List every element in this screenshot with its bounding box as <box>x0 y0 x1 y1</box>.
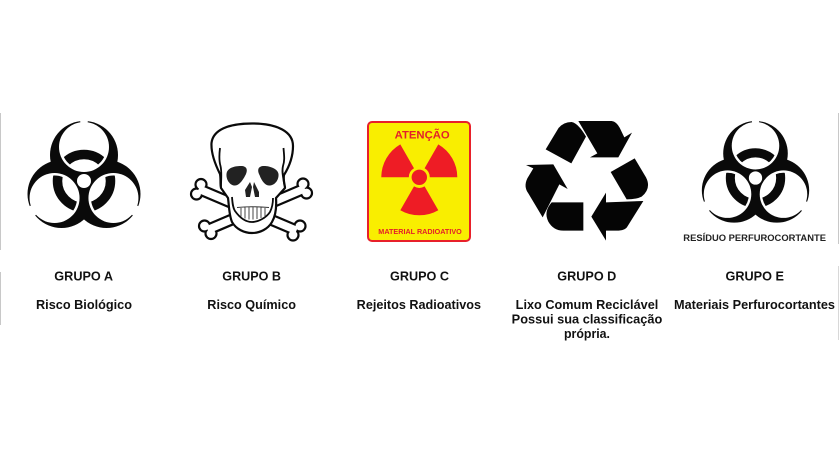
label: group D: Lixo Comum Reciclável <box>516 298 658 312</box>
eye right <box>258 166 279 186</box>
label: group D: própria. <box>564 327 610 341</box>
icon: skull and crossbones group B <box>190 124 313 242</box>
icon: radioactive warning sign group C <box>368 122 470 241</box>
label: group D: GRUPO D <box>557 270 616 284</box>
label: group C: GRUPO C <box>390 270 449 284</box>
right frame line bottom <box>838 266 839 340</box>
icon: recycling arrows group D <box>526 121 648 241</box>
skull outline <box>211 124 293 233</box>
label: group D: Possui sua classificação <box>512 312 663 326</box>
icon: biohazard group A <box>22 115 146 228</box>
left frame line top <box>0 113 1 250</box>
icon: biohazard group E <box>696 115 815 223</box>
icon caption: sharps waste: RESÍDUO PERFUROCORTANTE <box>683 233 826 244</box>
label: group A <box>36 270 132 312</box>
label: group B <box>207 270 296 312</box>
label: group C: Rejeitos Radioativos <box>357 298 481 312</box>
label: group A: Risco Biológico <box>36 298 132 312</box>
label: group E <box>674 270 835 312</box>
sign heading: ATENÇÃO <box>395 129 450 142</box>
infographic: waste groups <box>0 113 839 340</box>
right frame line top <box>838 113 839 244</box>
crossed bones <box>190 177 313 242</box>
eye left <box>226 166 247 186</box>
label: group B: GRUPO B <box>222 270 281 284</box>
radiation trefoil <box>381 144 457 215</box>
skull cheek lines <box>219 148 284 222</box>
label: group B: Risco Químico <box>207 298 296 312</box>
sign background <box>368 122 470 241</box>
sign caption: MATERIAL RADIOATIVO <box>378 229 462 236</box>
label: group C <box>357 270 481 312</box>
label: group A: GRUPO A <box>54 270 113 284</box>
teeth <box>237 207 269 220</box>
left frame line bottom <box>0 272 1 325</box>
label: group D <box>512 270 663 341</box>
label: group E: Materiais Perfurocortantes <box>674 298 835 312</box>
nose <box>245 182 259 197</box>
label: group E: GRUPO E <box>726 270 784 284</box>
